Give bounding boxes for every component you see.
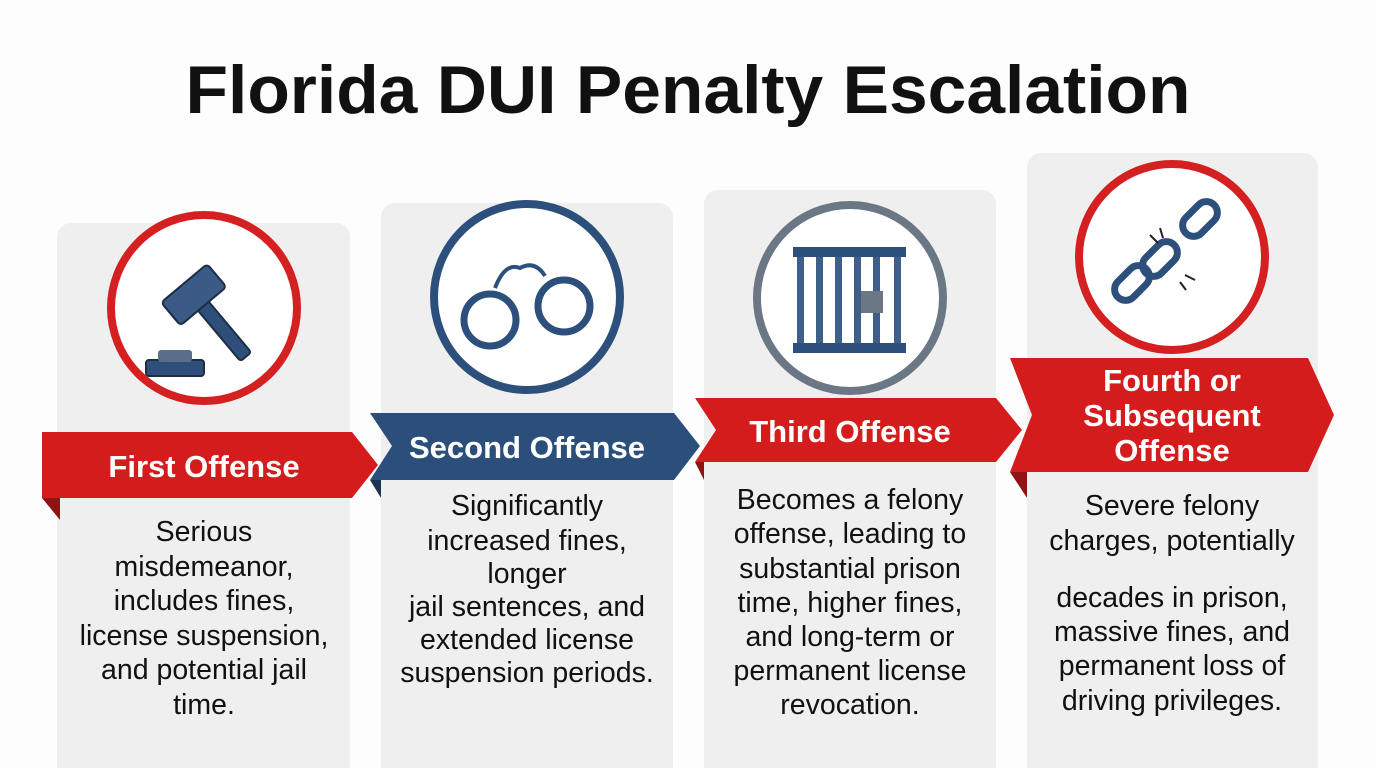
text: second offense: increased fines, — [427, 525, 627, 557]
icon: handcuffs — [434, 204, 620, 390]
text: second offense: Significantly — [451, 490, 604, 522]
text: first offense: includes fines, — [114, 585, 294, 617]
text: fourth offense: decades in prison, — [1056, 582, 1288, 614]
text: third offense: and long-term or — [745, 621, 955, 653]
text: third offense: revocation. — [780, 689, 920, 721]
panel: second offense — [370, 203, 700, 768]
text: fourth offense: charges, potentially — [1049, 525, 1296, 557]
banner: fourth offense: Fourth or — [1103, 363, 1241, 398]
banner: fourth offense: Subsequent — [1083, 398, 1261, 433]
text: fourth offense: permanent loss of — [1059, 650, 1285, 682]
icon: gavel — [111, 215, 297, 401]
panel: fourth offense — [1010, 153, 1334, 768]
banner: fourth offense: Offense — [1114, 433, 1230, 468]
banner: first offense — [42, 432, 378, 520]
text: third offense: substantial prison — [739, 553, 961, 585]
text: fourth offense: Severe felony — [1085, 490, 1260, 522]
text: first offense: license suspension, — [80, 620, 328, 652]
text: third offense: permanent license — [734, 655, 966, 687]
banner: third offense — [695, 398, 1022, 480]
icon: jail cell — [757, 205, 943, 391]
banner: third offense: Third Offense — [749, 414, 951, 449]
text: second offense: jail sentences, and — [408, 591, 645, 623]
icon: broken chain — [1079, 164, 1265, 350]
banner: first offense: First Offense — [108, 449, 300, 484]
banner: second offense: Second Offense — [409, 430, 645, 465]
text: fourth offense: massive fines, and — [1054, 616, 1290, 648]
text: fourth offense: driving privileges. — [1062, 685, 1282, 717]
title: Florida DUI Penalty Escalation — [186, 52, 1190, 128]
text: first offense: misdemeanor, — [114, 551, 294, 583]
text: third offense: offense, leading to — [734, 518, 966, 550]
text: first offense: Serious — [156, 516, 252, 548]
text: third offense: Becomes a felony — [737, 484, 964, 516]
panel: third offense — [695, 190, 1022, 768]
text: first offense: time. — [173, 689, 235, 721]
banner: fourth offense — [1010, 358, 1334, 498]
panel: first offense — [42, 215, 378, 768]
text: second offense: extended license — [420, 624, 634, 656]
banner: second offense — [370, 413, 700, 498]
text: first offense: and potential jail — [101, 654, 307, 686]
text: second offense: suspension periods. — [400, 657, 654, 689]
text: third offense: time, higher fines, — [738, 587, 962, 619]
text: second offense: longer — [487, 558, 567, 590]
